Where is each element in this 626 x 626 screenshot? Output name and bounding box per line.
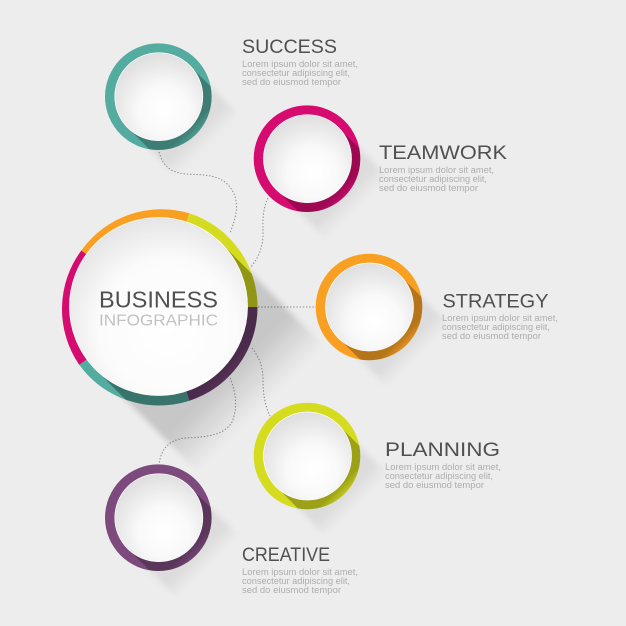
label: planning: PLANNING	[385, 439, 500, 461]
label: strategy: consectetur adipiscing elit,	[442, 322, 550, 333]
label: strategy	[442, 290, 558, 342]
label: strategy: sed do eiusmod tempor	[442, 331, 542, 342]
label: planning: Lorem ipsum dolor sit amet,	[385, 462, 501, 473]
node: creative	[105, 464, 230, 588]
node: strategy	[316, 254, 440, 378]
label: creative: consectetur adipiscing elit,	[242, 576, 350, 587]
connector: creative to hub	[159, 378, 236, 464]
node: success	[105, 43, 230, 168]
label: success: consectetur adipiscing elit,	[242, 68, 350, 79]
label: teamwork: sed do eiusmod tempor	[379, 183, 479, 194]
hub ring segment: orange	[81, 209, 189, 307]
label: strategy: Lorem ipsum dolor sit amet,	[442, 313, 558, 324]
label: teamwork: TEAMWORK	[379, 142, 507, 164]
connector: teamwork to hub	[251, 198, 268, 267]
label: planning	[385, 439, 501, 491]
hub subtitle: INFOGRAPHIC	[99, 312, 218, 330]
label: teamwork: Lorem ipsum dolor sit amet,	[379, 165, 494, 176]
label: planning: sed do eiusmod tempor	[385, 480, 485, 491]
hub ring segment: magenta	[62, 250, 159, 365]
label: teamwork: consectetur adipiscing elit,	[379, 174, 487, 185]
connector: strategy to hub	[258, 306, 316, 308]
label: creative	[242, 544, 358, 596]
label: success: SUCCESS	[242, 36, 337, 58]
connector: planning to hub	[252, 348, 270, 416]
hub ring segment: lime	[159, 213, 258, 307]
label: success: Lorem ipsum dolor sit amet,	[242, 59, 358, 70]
node: planning	[254, 402, 378, 527]
hub ring segment: dark purple	[159, 307, 258, 401]
connector: success to hub	[159, 152, 236, 233]
label: creative: CREATIVE	[242, 544, 330, 566]
node: teamwork	[254, 105, 378, 230]
label: teamwork	[379, 142, 507, 194]
hub white disc	[70, 218, 248, 396]
label: planning: consectetur adipiscing elit,	[385, 471, 493, 482]
label: creative: sed do eiusmod tempor	[242, 585, 342, 596]
hub long shadow	[96, 244, 332, 480]
main hub	[62, 209, 312, 460]
hub ring dark crescent	[100, 248, 258, 406]
hub ring segment: teal	[79, 307, 189, 406]
label: success	[242, 36, 358, 88]
label: success: sed do eiusmod tempor	[242, 77, 342, 88]
label: creative: Lorem ipsum dolor sit amet,	[242, 567, 358, 578]
hub title: BUSINESS	[99, 286, 218, 312]
label: strategy: STRATEGY	[442, 290, 548, 312]
